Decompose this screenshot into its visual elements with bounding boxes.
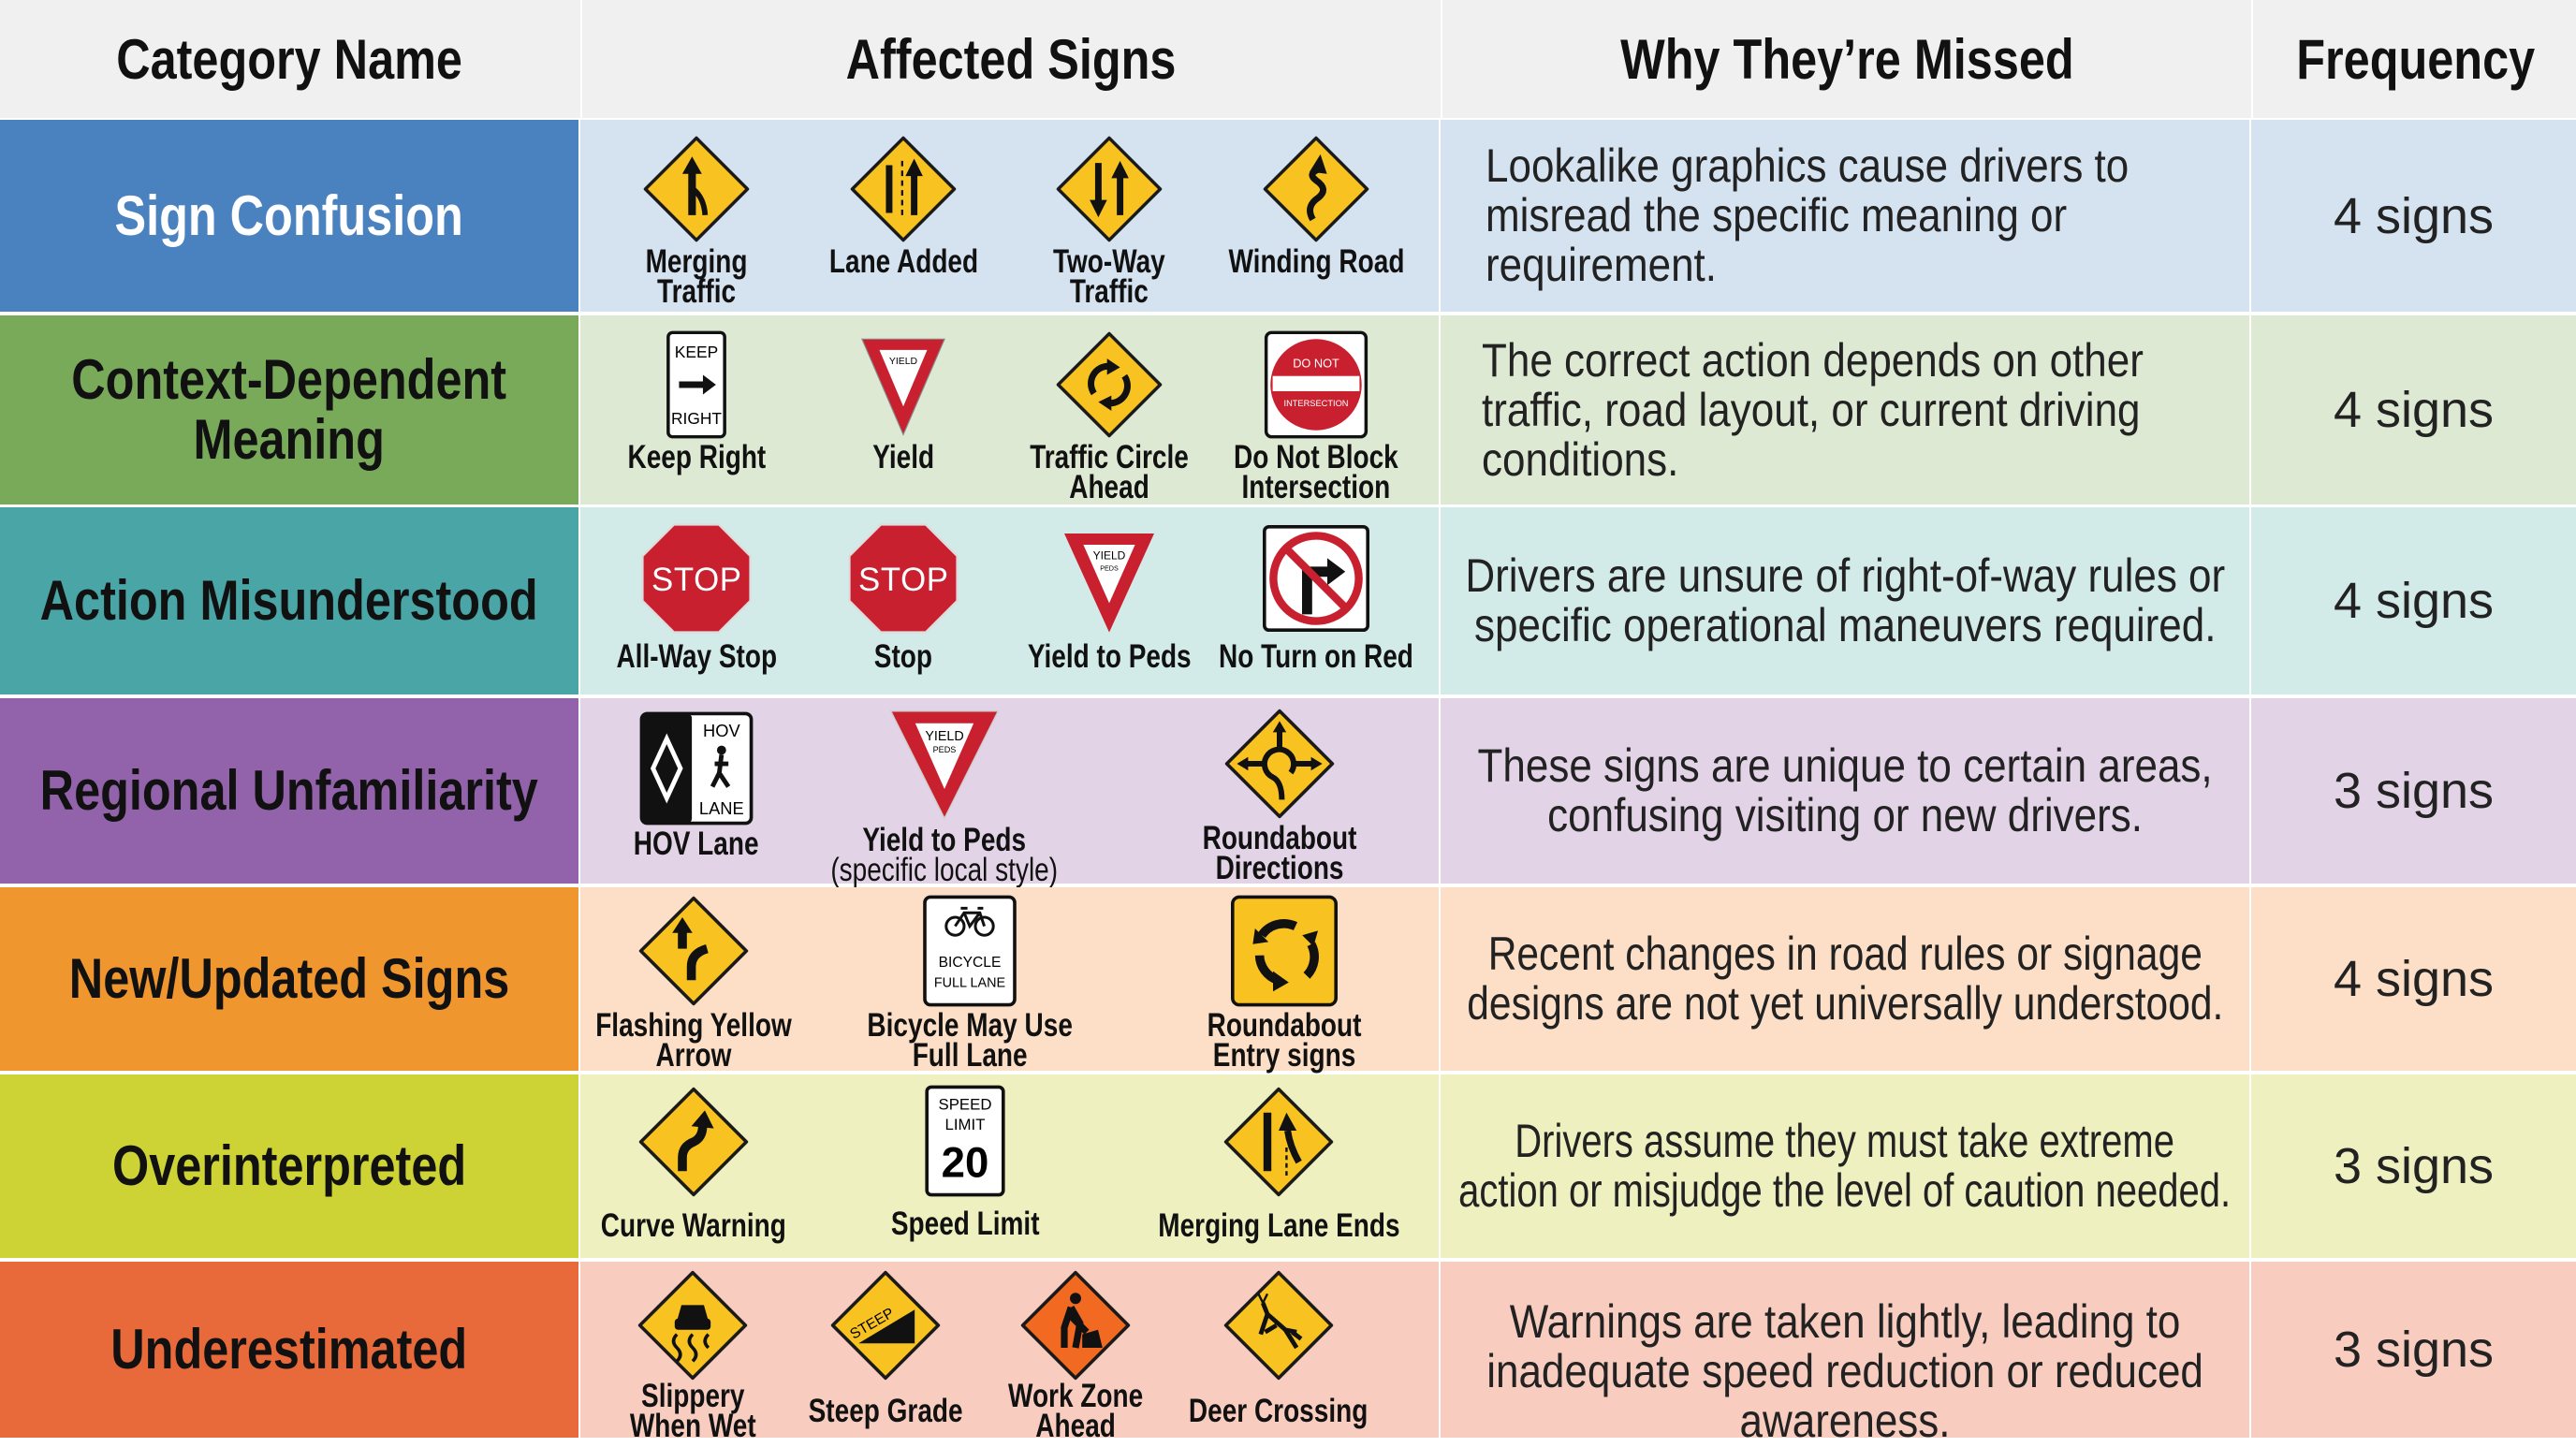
sign: HOV lane: HOV [703,721,740,740]
sign: speed limit: 20 [942,1138,988,1186]
sign: work zone ahead: Work Zone [1008,1378,1143,1414]
row: overinterpreted [0,1074,2576,1258]
category label [0,507,578,694]
sign: yield to peds [1028,533,1191,675]
sign: merging traffic: Merging [646,243,747,280]
category label: Action Misunderstood [40,569,538,632]
sign: bicycle may use full lane: BICYCLE [939,955,1001,971]
category label [0,1074,578,1258]
category label: New/Updated Signs [69,947,509,1010]
sign: roundabout directions: Directions [1216,850,1343,886]
sign: yield to peds local style: PEDS [933,745,956,754]
sign: yield: YIELD [889,357,918,367]
sign: slippery when wet [629,1271,756,1444]
header: frequency: Frequency [2296,28,2535,90]
sign: keep right [627,331,766,475]
category label: Context-Dependent [72,348,506,411]
sign: merging lane ends [1158,1088,1399,1244]
sign: roundabout entry signs: Roundabout [1208,1007,1361,1044]
sign: HOV lane: HOV Lane [634,826,759,862]
description: conditions. [1482,432,1678,485]
header: affected signs [580,0,1441,118]
sign: merging traffic [644,137,749,310]
sign: keep right: KEEP [675,343,718,361]
sign: roundabout directions: Roundabout [1203,820,1356,856]
description [1441,120,2249,312]
description: Drivers assume they must take extreme [1515,1115,2174,1167]
header row [0,0,2576,118]
category label: Meaning [194,408,385,471]
sign: two-way traffic: Traffic [1070,273,1149,310]
sign: yield to peds local style: YIELD [925,729,964,744]
sign: work zone ahead [1008,1271,1143,1444]
sign: roundabout entry signs: Entry signs [1213,1037,1355,1074]
description: requirement. [1486,239,1717,291]
sign: traffic circle ahead: Traffic Circle [1030,439,1189,475]
header: why missed: Why They’re Missed [1620,28,2073,90]
description [1441,1074,2249,1258]
description: specific operational maneuvers required. [1474,599,2216,651]
description: Warnings are taken lightly, leading to [1510,1295,2180,1348]
sign: do not block intersection: INTERSECTION [1284,399,1348,408]
description: These signs are unique to certain areas, [1477,739,2213,792]
sign: traffic circle ahead: Ahead [1069,469,1149,505]
sign: roundabout directions [1203,709,1357,886]
category label [0,315,578,504]
category label [0,1262,578,1438]
sign: winding road: Winding Road [1228,243,1404,280]
frequency: 4 signs [2334,187,2494,243]
sign: flashing yellow arrow: Flashing Yellow [595,1007,792,1044]
sign: winding road [1228,137,1404,280]
sign: no turn on red [1219,525,1413,675]
sign: traffic circle ahead [1030,331,1189,505]
sign: slippery when wet: Slippery [641,1378,744,1414]
sign: speed limit: SPEED [939,1095,991,1113]
category label [0,120,578,312]
sign: deer crossing: Deer Crossing [1189,1393,1368,1429]
sign: stop: STOP [858,562,948,598]
sign: keep right: RIGHT [671,409,722,428]
frequency: 4 signs [2334,382,2494,438]
header: frequency [2251,0,2576,118]
sign: work zone ahead: Ahead [1035,1408,1116,1444]
description: designs are not yet universally understood. [1467,977,2223,1030]
sign: curve warning [601,1088,786,1244]
sign: lane added [828,137,978,280]
category label: Underestimated [111,1318,467,1381]
description: Recent changes in road rules or signage [1487,928,2203,980]
sign: yield [861,339,945,475]
sign: yield to peds local style: Yield to Peds [863,822,1026,858]
sign: all-way stop: STOP [651,562,741,598]
sign: stop [848,524,959,675]
description [1441,1262,2249,1438]
frequency: 3 signs [2334,763,2494,819]
header: why missed [1441,0,2251,118]
category label: Overinterpreted [112,1134,466,1197]
description: traffic, road layout, or current driving [1482,384,2141,436]
row: sign confusion [0,120,2576,312]
sign: do not block intersection [1234,331,1398,505]
header: category name: Category Name [116,28,462,90]
sign: keep right: Keep Right [627,439,766,475]
sign: speed limit: LIMIT [945,1116,985,1133]
sign: steep grade [809,1271,962,1429]
sign: flashing yellow arrow: Arrow [656,1037,731,1074]
category label: Sign Confusion [115,183,463,247]
sign: yield to peds local style: (specific local style) [831,852,1058,888]
sign: HOV lane [634,711,759,862]
sign: HOV lane: LANE [699,798,744,818]
sign: all-way stop: All-Way Stop [616,638,777,675]
sign: roundabout entry signs [1208,895,1361,1074]
row: underestimated [0,1262,2576,1447]
frequency [2251,315,2576,504]
sign: flashing yellow arrow [595,897,792,1074]
category label [0,698,578,884]
sign: yield to peds: YIELD [1093,549,1126,563]
description: confusing visiting or new drivers. [1547,789,2143,841]
description: inadequate speed reduction or reduced [1486,1345,2203,1397]
sign: speed limit: Speed Limit [891,1206,1039,1242]
frequency [2251,507,2576,694]
sign: do not block intersection: DO NOT [1293,356,1339,370]
sign: bicycle may use full lane [867,895,1073,1074]
description: misread the specific meaning or [1486,189,2067,241]
description [1441,698,2249,884]
frequency [2251,887,2576,1071]
sign: yield: Yield [872,439,934,475]
row: context-dependent meaning [0,315,2576,505]
sign: slippery when wet: When Wet [630,1408,755,1444]
sign: deer crossing [1189,1271,1368,1429]
category label: Regional Unfamiliarity [40,759,538,822]
sign: yield to peds: Yield to Peds [1028,638,1191,675]
sign: no turn on red: No Turn on Red [1219,638,1413,675]
sign: two-way traffic: Two-Way [1053,243,1165,280]
sign: yield to peds local style [831,710,1058,888]
category label [0,887,578,1071]
sign: two-way traffic [1053,137,1165,310]
row: action misunderstood [0,507,2576,694]
sign: steep grade: STEEP [847,1305,897,1343]
description: awareness. [1739,1395,1951,1447]
frequency: 3 signs [2334,1138,2494,1194]
sign: stop: Stop [874,638,932,675]
sign: merging traffic: Traffic [657,273,736,310]
row: new/updated signs [0,887,2576,1074]
sign: bicycle may use full lane: FULL LANE [934,975,1005,990]
description [1441,507,2249,694]
row: regional unfamiliarity [0,698,2576,888]
sign: lane added: Lane Added [828,243,978,280]
sign: do not block intersection: Do Not Block [1234,439,1398,475]
frequency [2251,1262,2576,1438]
sign: curve warning: Curve Warning [601,1207,786,1244]
description [1441,887,2249,1071]
sign: bicycle may use full lane: Bicycle May Use [867,1007,1073,1044]
frequency: 3 signs [2334,1322,2494,1378]
description: The correct action depends on other [1482,333,2144,386]
description: Drivers are unsure of right-of-way rules or [1465,549,2225,602]
frequency: 4 signs [2334,951,2494,1007]
sign: do not block intersection: Intersection [1242,469,1390,505]
header: affected signs: Affected Signs [846,28,1177,90]
description [1441,315,2249,504]
frequency: 4 signs [2334,573,2494,629]
sign: merging lane ends: Merging Lane Ends [1158,1207,1399,1244]
frequency [2251,1074,2576,1258]
sign: all-way stop [616,524,777,675]
frequency [2251,120,2576,312]
sign: bicycle may use full lane: Full Lane [913,1037,1027,1074]
frequency [2251,698,2576,884]
sign: speed limit [891,1086,1039,1242]
sign: steep grade: Steep Grade [809,1393,962,1429]
description: Lookalike graphics cause drivers to [1486,139,2129,192]
description: action or misjudge the level of caution needed. [1459,1164,2232,1217]
sign: yield to peds: PEDS [1100,564,1119,573]
